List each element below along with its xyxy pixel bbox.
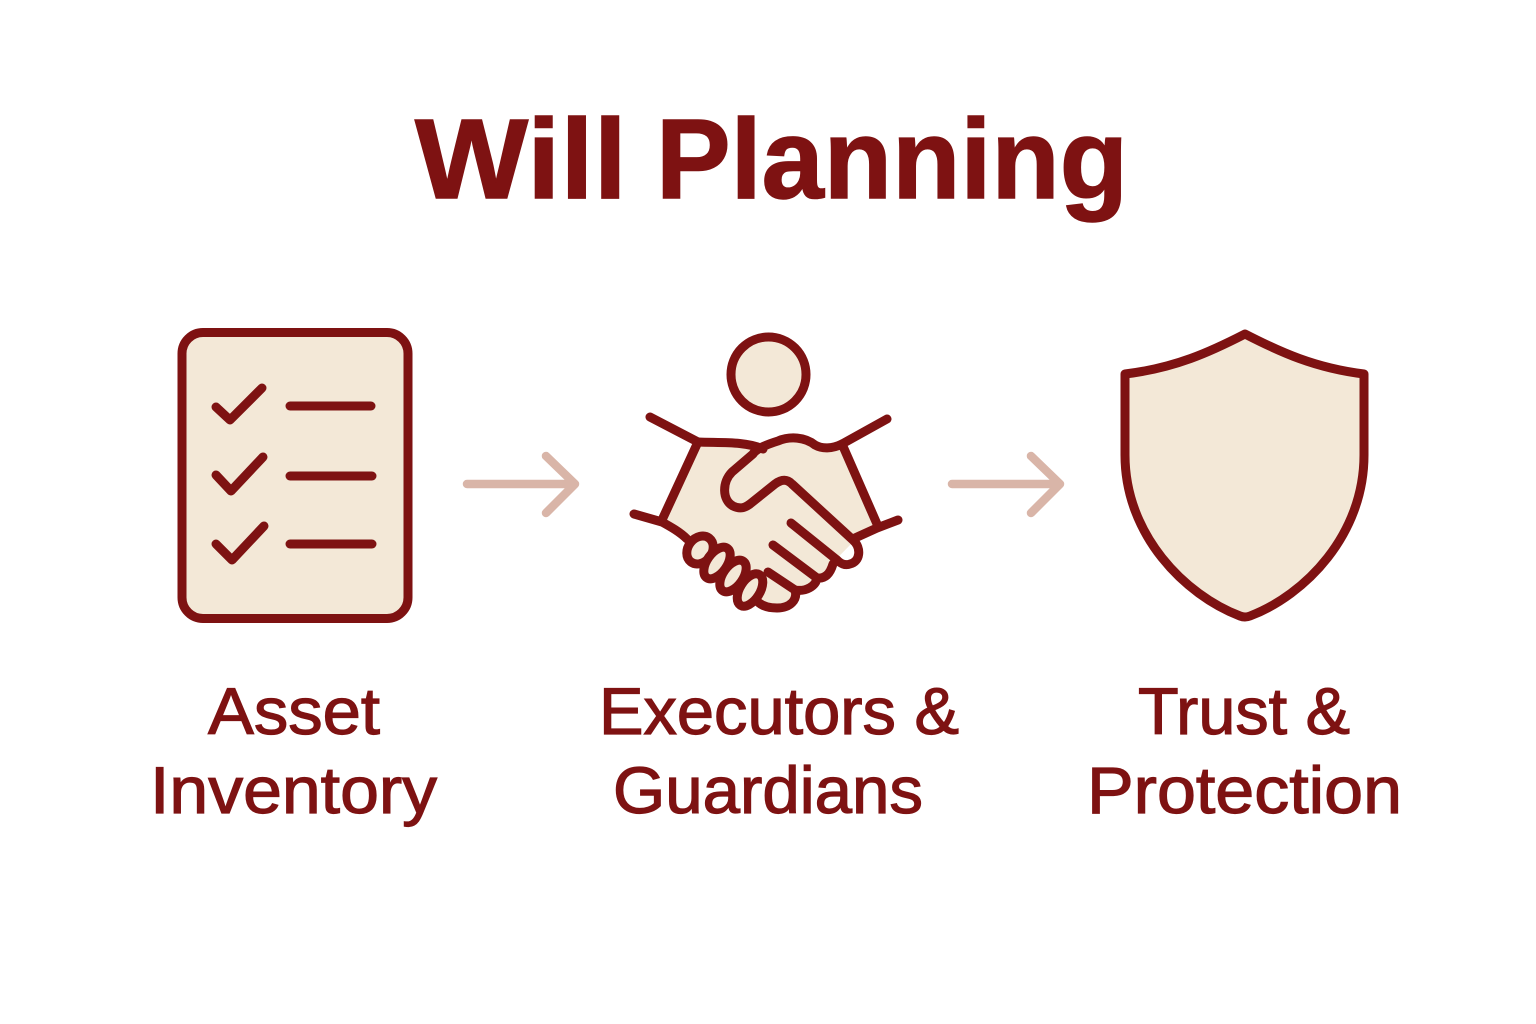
icon: handshake with person (634, 337, 898, 611)
knuckles (681, 531, 768, 611)
label: trust and protection: Trust & (1138, 674, 1350, 748)
top of hands (698, 438, 859, 565)
icon: shield (1125, 334, 1364, 617)
title: Will (415, 96, 627, 222)
title (415, 96, 1128, 222)
arms and sleeves (634, 417, 898, 539)
label: executors and guardians: Guardians (613, 753, 923, 827)
arrow: inventory to executors (467, 456, 575, 513)
arrow: executors to trust (952, 456, 1060, 513)
label: asset inventory (150, 674, 437, 827)
label: asset inventory: Asset (208, 674, 380, 748)
person head (731, 337, 806, 412)
fingers (791, 523, 837, 560)
hands fill (662, 438, 877, 606)
label: asset inventory: Inventory (150, 753, 437, 827)
label: executors and guardians (599, 674, 959, 827)
icon: checklist document (182, 332, 408, 618)
label: trust and protection: Protection (1087, 753, 1402, 827)
title: Planning (656, 96, 1128, 222)
label: trust and protection (1087, 674, 1402, 827)
label: executors and guardians: Executors & (599, 674, 959, 748)
